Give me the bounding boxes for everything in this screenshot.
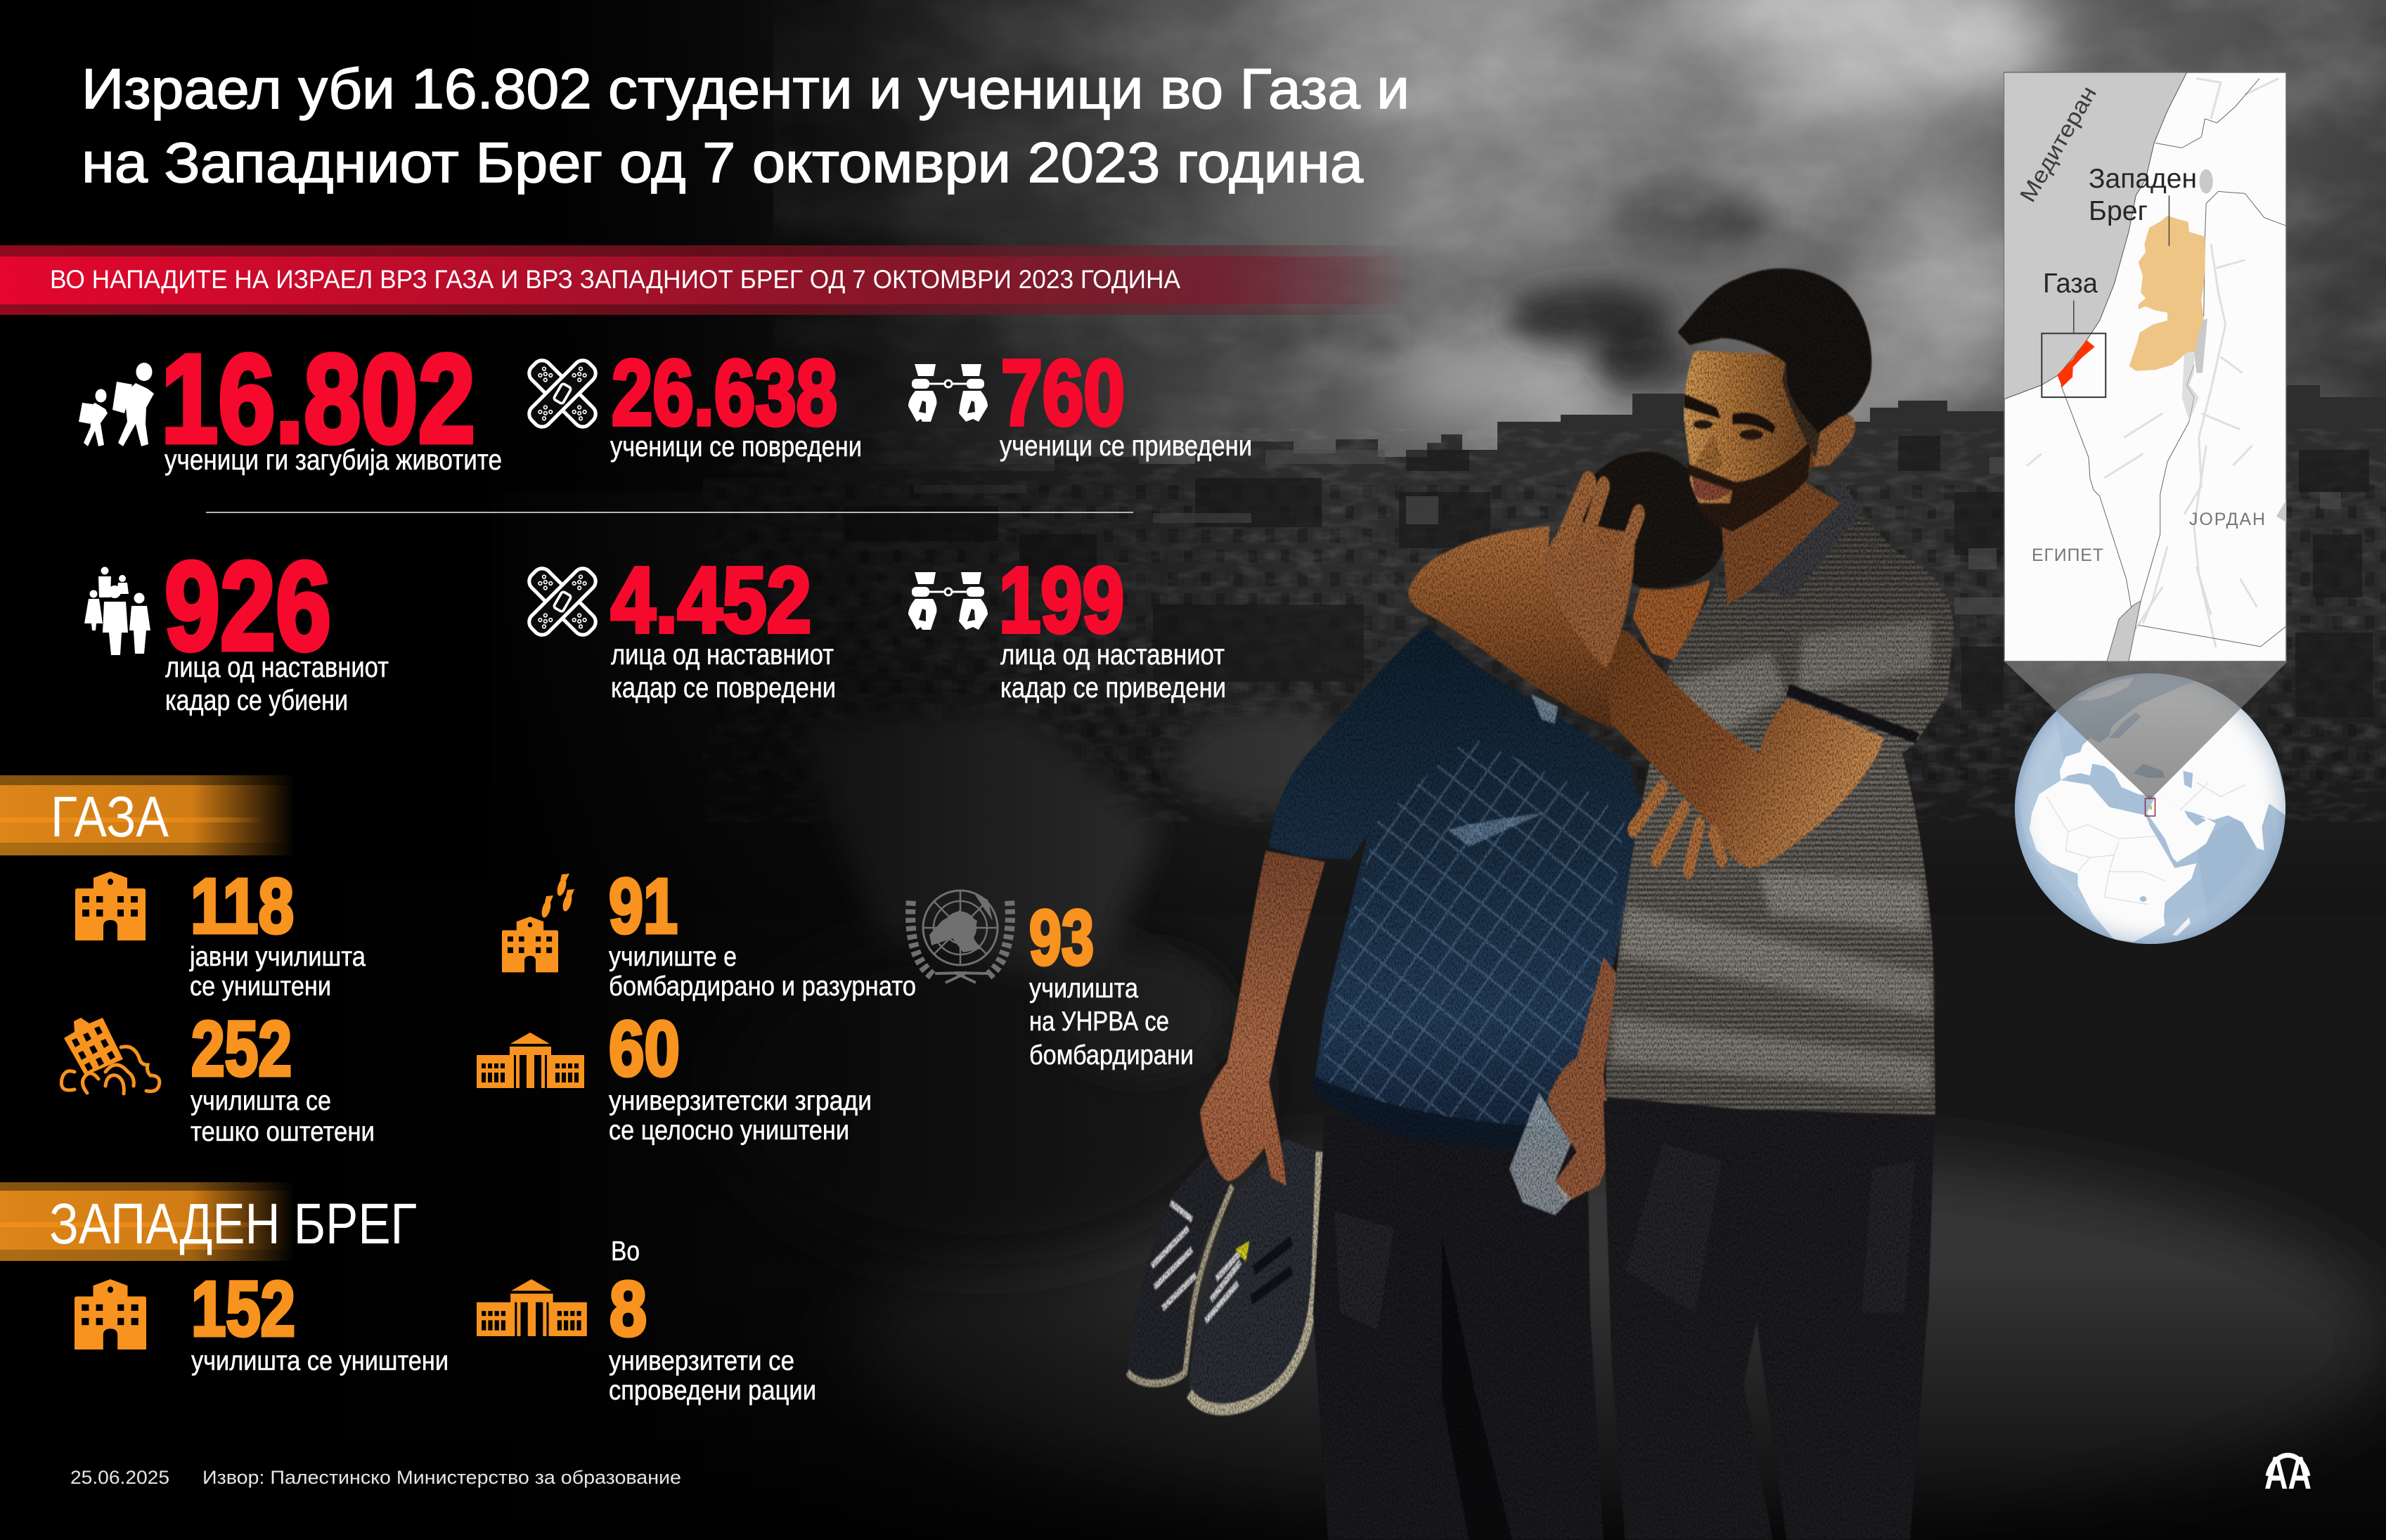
- West Bank: [2129, 216, 2205, 371]
- map label: Mediterranean: Медитеран: [2015, 82, 2101, 207]
- stat: teaching staff injured: кадар се повредени: [611, 671, 836, 704]
- stat: public schools destroyed: [75, 863, 366, 1002]
- stat: schools bombed: [502, 863, 916, 1002]
- man's hand on boy's head: [1545, 484, 1639, 668]
- stat: universities raided: спроведени рации: [609, 1376, 816, 1406]
- icon: walking students with backpacks: [79, 363, 154, 446]
- stat: UNRWA schools bombed: 93: [1029, 895, 1094, 981]
- stat: teaching staff injured: лица од наставниот: [611, 638, 834, 671]
- stat: university buildings destroyed: [477, 1006, 872, 1146]
- stat: universities raided: 8: [610, 1266, 647, 1352]
- stat: university buildings destroyed: 60: [609, 1006, 680, 1092]
- red subtitle band: ВО НАПАДИТЕ НА ИЗРАЕЛ ВРЗ ГАЗА И ВРЗ ЗАПАДНИОТ БРЕГ ОД 7 ОКТОМВРИ 2023 ГОДИНА: [50, 265, 1180, 294]
- map label: West Bank: [2089, 164, 2197, 226]
- boy's blue sweater: [1269, 626, 1641, 1148]
- stat: universities raided: [477, 1236, 816, 1406]
- stat: UNRWA schools bombed: училишта: [1029, 973, 1138, 1004]
- stat: teaching staff killed: 926: [165, 536, 331, 676]
- icon: school building: [75, 872, 146, 940]
- icon: group of people: [84, 567, 150, 655]
- stat: teaching staff killed: [84, 536, 389, 716]
- man's hair: [1677, 268, 1871, 458]
- globe inset: [2004, 661, 2292, 949]
- footer: source: Извор: Палестинско Министерство за образование: [202, 1467, 681, 1488]
- globe inland seas: [2109, 712, 2206, 902]
- red subtitle band: [0, 245, 1413, 315]
- stat: UNRWA schools bombed: бомбардирани: [1029, 1040, 1194, 1070]
- stat: West Bank schools destroyed: училишта се уништени: [191, 1346, 449, 1376]
- stat: teaching staff detained: 199: [999, 548, 1124, 652]
- stat: UNRWA schools bombed: [910, 891, 1194, 1070]
- stat: university buildings destroyed: универзитетски згради: [609, 1086, 872, 1116]
- pointer cone from map to globe: [2004, 661, 2288, 800]
- stat: schools heavily damaged: тешко оштетени: [191, 1117, 375, 1147]
- stat: schools heavily damaged: 252: [191, 1006, 292, 1092]
- man's face: [1684, 351, 1817, 531]
- map label: Gaza: Газа: [2043, 268, 2098, 299]
- stat: schools bombed: училиште е: [609, 942, 737, 972]
- man's arms: [1408, 526, 1884, 870]
- man's jeans: [1604, 1101, 1934, 1540]
- stat: UNRWA schools bombed: на УНРВА се: [1029, 1007, 1169, 1037]
- stat: university buildings destroyed: се целосно уништени: [609, 1115, 849, 1146]
- stat: students detained: 760: [1001, 341, 1125, 444]
- boy's jeans: [1313, 1113, 1604, 1540]
- icon: collapsing building in dust: [61, 1018, 160, 1094]
- boy's face: [1633, 580, 1710, 660]
- stat: students detained: [908, 341, 1252, 462]
- man's beard: [1687, 438, 1812, 531]
- stat: universities raided: Во: [611, 1236, 640, 1267]
- stat: students killed: 16.802: [161, 328, 475, 469]
- stat: public schools destroyed: јавни училишта: [189, 942, 366, 972]
- boy's shoes: [1128, 1139, 1320, 1410]
- icon: university building: [477, 1033, 584, 1088]
- stat: students injured: ученици се повредени: [610, 430, 862, 462]
- stat: schools bombed: 91: [609, 863, 678, 950]
- stat: students detained: ученици се приведени: [1000, 429, 1252, 462]
- stat: schools heavily damaged: училишта се: [191, 1086, 331, 1116]
- stat: West Bank schools destroyed: [75, 1266, 449, 1376]
- stat: students injured: 26.638: [612, 341, 837, 444]
- map label: West Bank: Брег: [2089, 196, 2148, 226]
- sea: [2004, 72, 2187, 399]
- title: Израел уби 16.802 студенти и ученици во Газа и: [82, 58, 1410, 121]
- lakes and Gulf of Aqaba: [2107, 169, 2286, 661]
- icon: school building: [75, 1279, 146, 1350]
- country borders: [2061, 79, 2286, 647]
- stat: universities raided: универзитети се: [609, 1346, 794, 1376]
- stat: teaching staff detained: кадар се приведени: [1000, 671, 1226, 704]
- stat: public schools destroyed: се уништени: [190, 971, 331, 1002]
- footer: date: 25.06.2025: [70, 1467, 169, 1488]
- water bottle: [1509, 1092, 1571, 1215]
- stat: teaching staff injured: [525, 548, 836, 704]
- man's striped shirt: [1606, 481, 1954, 1115]
- Gaza frame: [2042, 333, 2106, 397]
- stat: public schools destroyed: 118: [191, 863, 294, 950]
- section band: Gaza: ГАЗА: [51, 785, 169, 849]
- boy's hair: [1579, 452, 1724, 588]
- Gaza Strip: [2057, 340, 2095, 387]
- stat: West Bank schools destroyed: 152: [191, 1266, 295, 1352]
- section band: Gaza: [0, 775, 295, 855]
- skyline: [492, 385, 2386, 914]
- icon: crossed bandages: [525, 356, 600, 431]
- icon: university building: [477, 1279, 587, 1336]
- stat: teaching staff killed: лица од наставниот: [165, 651, 389, 683]
- icon: bombs falling on school: [502, 874, 574, 972]
- section band: West Bank: [0, 1182, 417, 1261]
- map label: West Bank: Западен: [2089, 164, 2197, 194]
- boy's bare arm and hand: [1200, 851, 1325, 1186]
- logo: Anadolu Agency: AA: [2264, 1447, 2311, 1499]
- stat: teaching staff detained: [908, 548, 1226, 704]
- terrain relief shading: [2027, 79, 2278, 647]
- stat: students killed: [79, 328, 502, 476]
- globe landmasses: [2030, 677, 2285, 942]
- title: [82, 58, 1410, 195]
- map label: Jordan: JОРДАН: [2189, 510, 2265, 529]
- man's neck: [1722, 482, 1840, 605]
- title: на Западниот Брег од 7 октомври 2023 година: [82, 131, 1364, 195]
- icon: handcuffed hands: [908, 572, 988, 630]
- icon: crossed bandages: [525, 564, 600, 639]
- boy's right hand: [1547, 957, 1617, 1203]
- icon: United Nations emblem: [910, 891, 1010, 983]
- stat: schools bombed: бомбардирано и разурнато: [609, 971, 916, 1002]
- locator map: [2004, 72, 2286, 661]
- stat: teaching staff detained: лица од наставниот: [1000, 638, 1225, 671]
- map label: Egypt: ЕГИПЕТ: [2032, 545, 2103, 565]
- stat: teaching staff injured: 4.452: [611, 548, 811, 652]
- stat: teaching staff killed: кадар се убиени: [165, 684, 348, 716]
- section band: West Bank: ЗАПАДЕН БРЕГ: [49, 1192, 417, 1256]
- stat: schools heavily damaged: [61, 1006, 375, 1147]
- photo: young man embracing a crying boy: [1128, 268, 1954, 1540]
- man's ear: [1813, 413, 1855, 467]
- stat: students killed: ученици ги загубија животите: [165, 444, 502, 476]
- stat: students injured: [525, 341, 862, 462]
- icon: handcuffed hands: [908, 364, 988, 422]
